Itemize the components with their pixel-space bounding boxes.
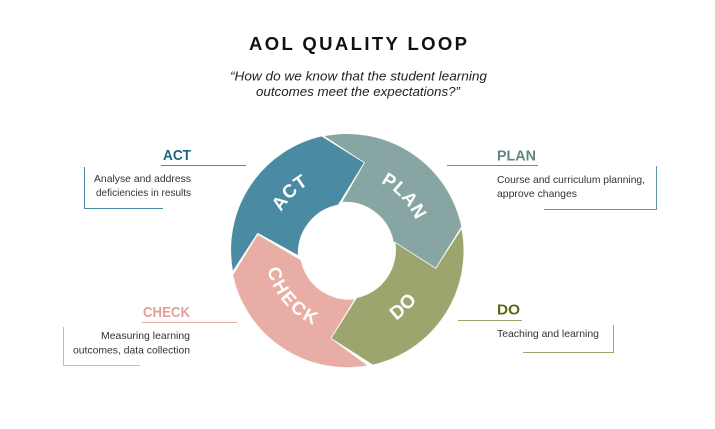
heading: ACT: ACT [163, 147, 191, 164]
segment: PLAN: PLAN [382, 172, 427, 219]
title: AOL QUALITY LOOP [249, 33, 467, 54]
text: DO description: Teaching and learning [497, 328, 599, 340]
segment: PLAN [323, 133, 462, 268]
callout: PLAN [447, 148, 656, 210]
segment: CHECK [232, 234, 368, 368]
text: CHECK description [73, 330, 190, 356]
cycle diagram [230, 133, 464, 368]
segment: ACT: ACT [274, 174, 305, 212]
callout: CHECK [64, 304, 237, 366]
subtitle question: outcomes meet the expectations?” [256, 84, 461, 99]
heading: CHECK: CHECK [143, 304, 190, 321]
text: PLAN description [497, 174, 645, 200]
callout: ACT [84, 147, 246, 208]
subtitle question [230, 68, 488, 99]
segment: DO: DO [389, 294, 414, 320]
text: PLAN description: Course and curriculum planning, [497, 174, 645, 186]
text: PLAN description: approve changes [497, 188, 577, 200]
segment: DO [332, 228, 464, 366]
segment: ACT [230, 136, 365, 272]
text: CHECK description: Measuring learning [101, 330, 190, 342]
text: ACT description [94, 173, 191, 199]
segment: CHECK: CHECK [268, 268, 319, 325]
heading: DO: DO [497, 302, 520, 318]
text: CHECK description: outcomes, data collection [73, 344, 190, 356]
text: ACT description: Analyse and address [94, 173, 191, 185]
subtitle question: “How do we know that the student learning [230, 68, 488, 84]
text: ACT description: deficiencies in results [96, 187, 191, 199]
callout: DO [458, 302, 614, 352]
heading: PLAN: PLAN [497, 148, 536, 164]
